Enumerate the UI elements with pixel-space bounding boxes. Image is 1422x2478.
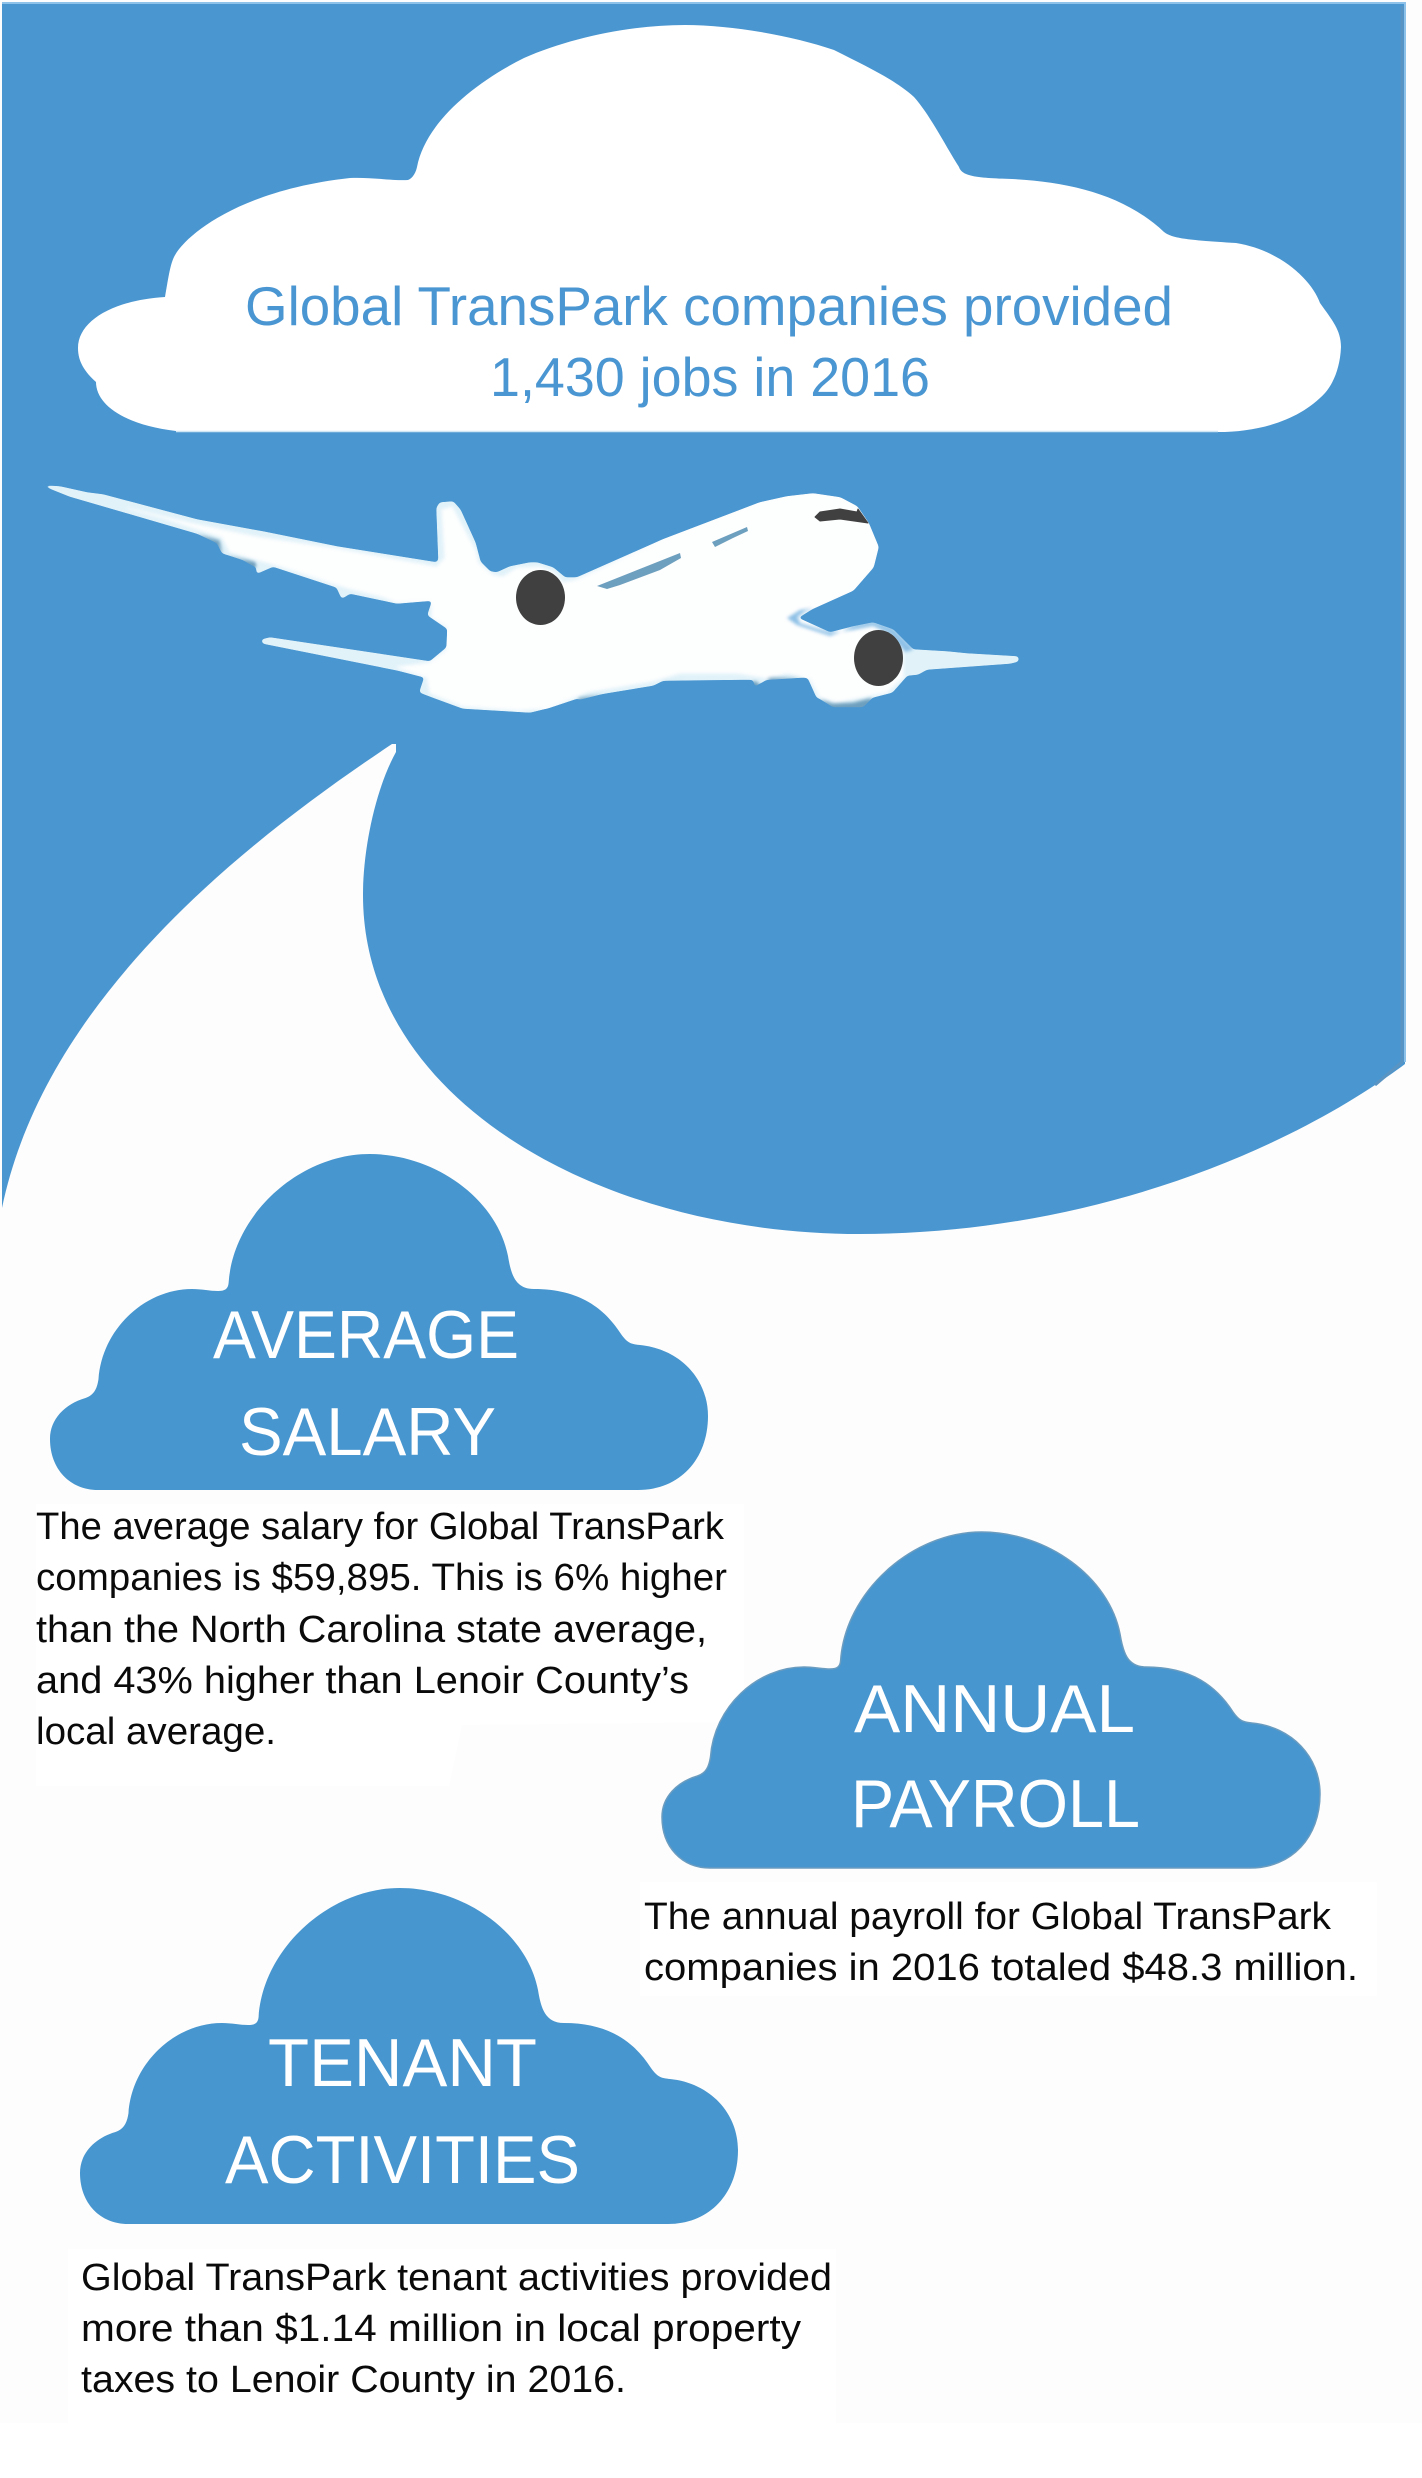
body text: annual payroll — [644, 1896, 1358, 1989]
icon: airplane — [45, 486, 1018, 712]
panel: tenant activities — [68, 1888, 836, 2423]
airframe light outline — [45, 486, 1018, 712]
text box backing — [640, 1882, 1377, 1996]
cockpit window — [815, 509, 868, 523]
heading: tenant activities — [225, 2025, 580, 2198]
body text: annual payroll: companies in 2016 totaled $48.3 million. — [644, 1947, 1358, 1989]
cloud: average salary — [50, 1154, 708, 1490]
right engine — [854, 630, 903, 686]
body text: average salary: than the North Carolina state average, — [36, 1609, 707, 1651]
underside shadow — [196, 533, 872, 707]
body text: average salary — [36, 1506, 727, 1753]
nose-to-engine highlight — [787, 608, 913, 652]
heading: average salary: AVERAGE — [213, 1297, 519, 1373]
airframe with shading — [45, 486, 1018, 712]
text box backing — [68, 2249, 836, 2423]
headline text: Global TransPark companies provided — [245, 275, 1173, 337]
body text: tenant activities — [81, 2257, 832, 2401]
heading: annual payroll: ANNUAL — [854, 1671, 1135, 1747]
left engine — [516, 570, 565, 625]
heading: average salary — [213, 1297, 519, 1470]
body text: tenant activities: taxes to Lenoir County in 2016. — [81, 2359, 626, 2401]
headline text: 1,430 jobs in 2016 — [490, 346, 930, 408]
text box backing — [36, 1504, 744, 1786]
cloud: annual payroll — [662, 1532, 1320, 1868]
heading: annual payroll — [851, 1671, 1140, 1842]
panel: annual payroll — [640, 1532, 1377, 1996]
headline cloud — [78, 25, 1341, 432]
cloud: tenant activities — [80, 1888, 738, 2224]
panel: average salary — [36, 1154, 744, 1786]
heading: tenant activities: ACTIVITIES — [225, 2122, 580, 2198]
headline text — [245, 275, 1173, 408]
body text: average salary: companies is $59,895. This is 6% higher — [36, 1557, 727, 1599]
sky background with swoosh contrail — [2, 3, 1405, 1234]
cloud shape — [78, 25, 1341, 432]
heading: annual payroll: PAYROLL — [851, 1766, 1140, 1842]
body text: average salary: and 43% higher than Lenoir County’s — [36, 1660, 689, 1702]
airframe white body — [127, 494, 903, 710]
body text: average salary: local average. — [36, 1711, 276, 1753]
body text: annual payroll: The annual payroll for Global TransPark — [644, 1896, 1332, 1938]
body text: average salary: The average salary for Global TransPark — [36, 1506, 725, 1548]
heading: tenant activities: TENANT — [268, 2025, 537, 2101]
passenger window bands — [597, 527, 748, 589]
body text: tenant activities: Global TransPark tenant activities provided — [81, 2257, 832, 2299]
heading: average salary: SALARY — [239, 1394, 496, 1470]
body text: tenant activities: more than $1.14 million in local property — [81, 2308, 801, 2350]
